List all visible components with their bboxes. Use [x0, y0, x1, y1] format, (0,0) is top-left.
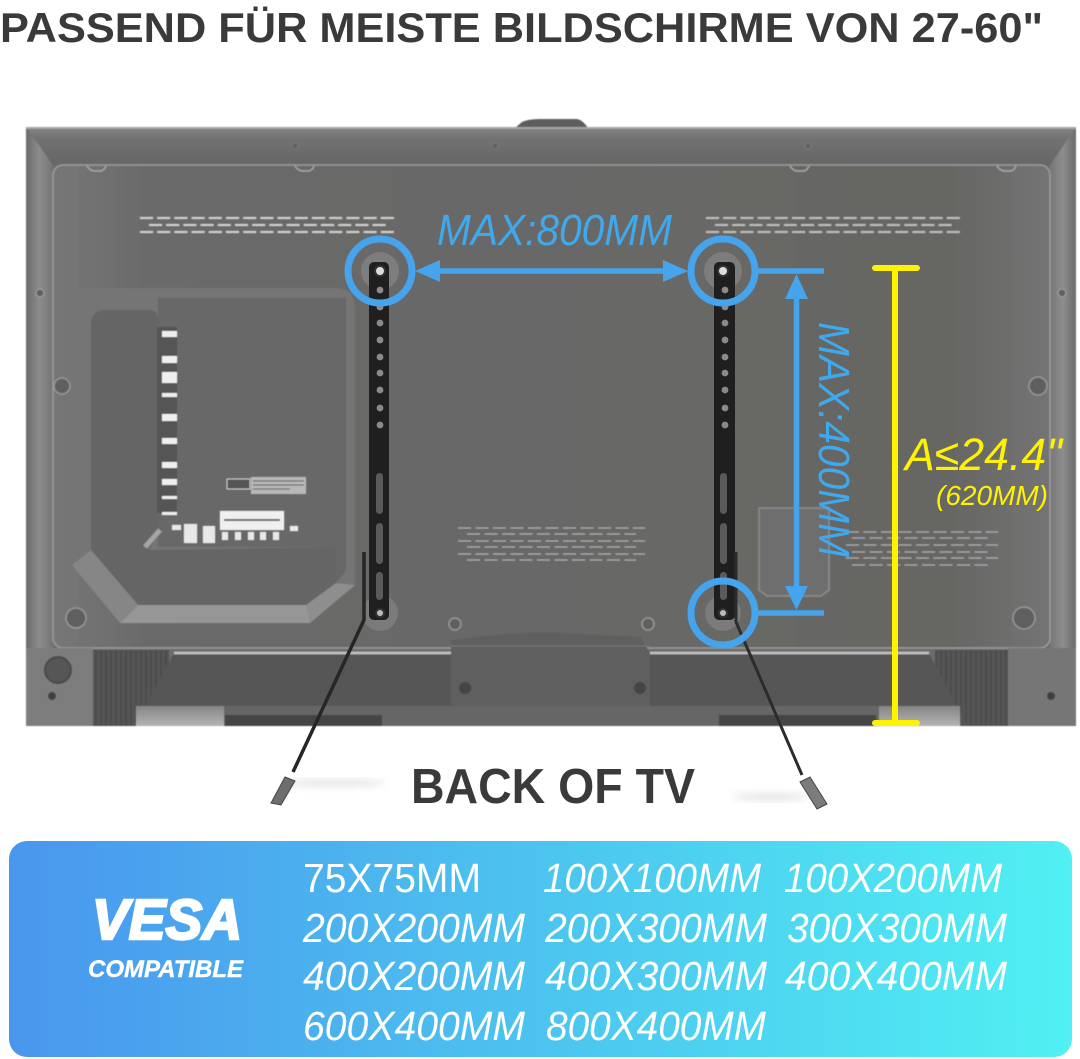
- caption: back of tv: BACK OF TV: [411, 760, 695, 814]
- size list: 200X200MM: [302, 905, 526, 951]
- foot shadows: [285, 780, 808, 800]
- side ports: [157, 327, 177, 515]
- bar: [369, 262, 389, 620]
- size list: 300X300MM: [787, 905, 1008, 951]
- screw bosses: [36, 143, 1066, 630]
- size list: 400X300MM: [545, 953, 768, 999]
- wall hook recess: [759, 508, 829, 596]
- TV back panel photo: [26, 119, 1076, 726]
- label: max 800mm: MAX:800MM: [437, 206, 672, 255]
- size list: 800X400MM: [546, 1003, 767, 1049]
- size list: 100X200MM: [784, 855, 1003, 901]
- blue dimension markers: [348, 239, 824, 645]
- upper vents: [140, 218, 963, 232]
- label plate: [227, 477, 306, 494]
- foot: [271, 777, 295, 805]
- bottom ports: [145, 511, 298, 547]
- size list: 100X100MM: [543, 855, 762, 901]
- horizontal 800mm arrow: [415, 260, 688, 282]
- label: height limit in mm: (620MM): [936, 480, 1048, 511]
- screw bosses: [361, 252, 399, 290]
- slots: [720, 473, 727, 600]
- right mounting bracket: [704, 252, 827, 809]
- bolts: [375, 266, 385, 276]
- support arm: [293, 552, 364, 772]
- size list: 75X75MM: [303, 855, 481, 901]
- top tab: [515, 119, 588, 128]
- compatible text: COMPATIBLE: [88, 956, 244, 983]
- screw bosses: [704, 252, 742, 290]
- lower vents: [458, 528, 998, 565]
- holes: [377, 287, 383, 428]
- holes: [722, 287, 728, 428]
- vertical 400mm arrow: [757, 271, 824, 613]
- outer bezel: [26, 127, 1076, 726]
- panel background: [9, 841, 1072, 1057]
- yellow height marker: [875, 268, 917, 723]
- left mounting bracket: [271, 252, 399, 805]
- title: PASSEND FÜR MEISTE BILDSCHIRME VON 27-60": [0, 4, 1043, 51]
- connector recess: [72, 288, 355, 623]
- VESA logo text: VESA: [92, 888, 242, 952]
- mount circles: [348, 239, 755, 645]
- size list: [302, 855, 1008, 1049]
- bolts: [718, 266, 728, 276]
- size list: 400X200MM: [303, 953, 526, 999]
- label: max 400mm: MAX:400MM: [809, 322, 858, 557]
- bar: [714, 262, 735, 620]
- foot: [800, 777, 827, 809]
- size list: 600X400MM: [303, 1003, 526, 1049]
- slots: [376, 473, 383, 600]
- bottom band: [26, 633, 1076, 726]
- size list: 200X300MM: [544, 905, 768, 951]
- top clips: [87, 166, 1016, 171]
- size list: 400X400MM: [785, 953, 1008, 999]
- inner panel: [53, 165, 1050, 648]
- panel: VESA compatibility: [9, 841, 1072, 1057]
- label: height limit: A≤24.4": [902, 429, 1064, 480]
- support arm: [736, 552, 802, 775]
